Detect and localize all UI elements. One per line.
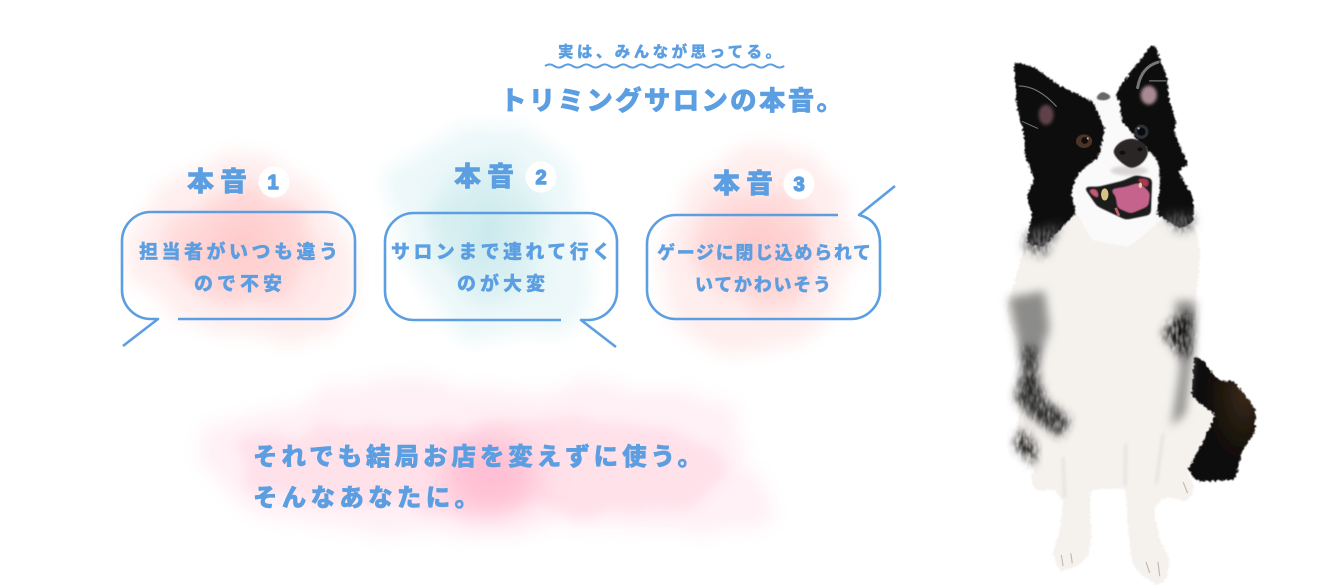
dog gum (1086, 189, 1100, 201)
dog mouth roof (1134, 177, 1150, 189)
dog neck fur fringe (1024, 215, 1194, 257)
watercolor: blob behind card 2 (389, 125, 591, 341)
dog head tuft (1094, 91, 1114, 101)
dog grey fur left shoulder (1016, 345, 1070, 437)
card 3 heading: 本音 (713, 169, 773, 199)
dog teeth (1101, 183, 1142, 201)
dog ear inner (1019, 62, 1166, 128)
card 1 number badge: 1 (267, 172, 279, 194)
dog nose (1113, 138, 1148, 168)
dog muzzle shade (1111, 166, 1148, 175)
dog dark patch lower left (1014, 428, 1036, 466)
card 3 speech bubble (647, 186, 895, 319)
illustration: border collie (1006, 43, 1255, 585)
card 1 (122, 166, 355, 346)
card 2 text (391, 240, 611, 295)
card 1 text (139, 240, 338, 295)
dog dark patch right shoulder (1163, 311, 1192, 355)
dog tail (1183, 355, 1255, 482)
dog grey wash left (1009, 291, 1066, 433)
dog tongue (1109, 183, 1150, 214)
card 3 text: ゲージに閉じ込められて (657, 242, 871, 263)
card 3 number badge: 3 (793, 174, 805, 196)
right eye (1134, 125, 1148, 139)
card 2 text: のが大変 (457, 272, 545, 295)
left eye (1076, 134, 1092, 148)
watercolor: blob behind card 3 (659, 143, 853, 352)
card 1 speech bubble (122, 212, 355, 346)
dog head black left (1014, 61, 1105, 247)
dog eyes (1076, 125, 1148, 148)
dog mouth (1083, 175, 1152, 220)
card 2 number badge (526, 162, 556, 192)
dog lip (1116, 208, 1119, 216)
watercolor: bottom pink wash (201, 381, 771, 536)
closing message (253, 442, 702, 512)
card 3 text (657, 242, 871, 295)
card 3 number badge (784, 168, 814, 200)
dog leg shadows (1063, 433, 1163, 498)
ear strands (1019, 62, 1166, 128)
dog head white (1070, 94, 1161, 247)
card 2 number badge: 2 (535, 167, 547, 189)
card 2 speech bubble (385, 213, 617, 347)
card 3 (647, 168, 895, 319)
title: トリミングサロンの本音。 (500, 86, 843, 116)
closing message: そんなあなたに。 (253, 484, 479, 512)
card 3 text: いてかわいそう (695, 275, 831, 295)
card 2 (385, 162, 617, 347)
right ear pink (1141, 86, 1157, 105)
dog head black right (1115, 43, 1194, 228)
card 2 heading: 本音 (454, 162, 514, 192)
dog grey wash right (1172, 301, 1195, 427)
card 1 text: ので不安 (194, 272, 282, 295)
card 1 heading: 本音 (187, 167, 247, 197)
closing message: それでも結局お店を変えずに使う。 (253, 442, 702, 471)
watercolor: blob behind card 1 (126, 150, 354, 340)
card 2 text: サロンまで連れて行く (391, 240, 611, 263)
dog body (1006, 200, 1216, 585)
wavy underline (545, 64, 784, 68)
dog paw toes (1061, 483, 1187, 576)
eyebrow text: 実は、みんなが思ってる。 (558, 42, 781, 61)
card 1 number badge (258, 166, 290, 198)
card 1 text: 担当者がいつも違う (139, 240, 338, 263)
left ear pink (1039, 105, 1054, 125)
